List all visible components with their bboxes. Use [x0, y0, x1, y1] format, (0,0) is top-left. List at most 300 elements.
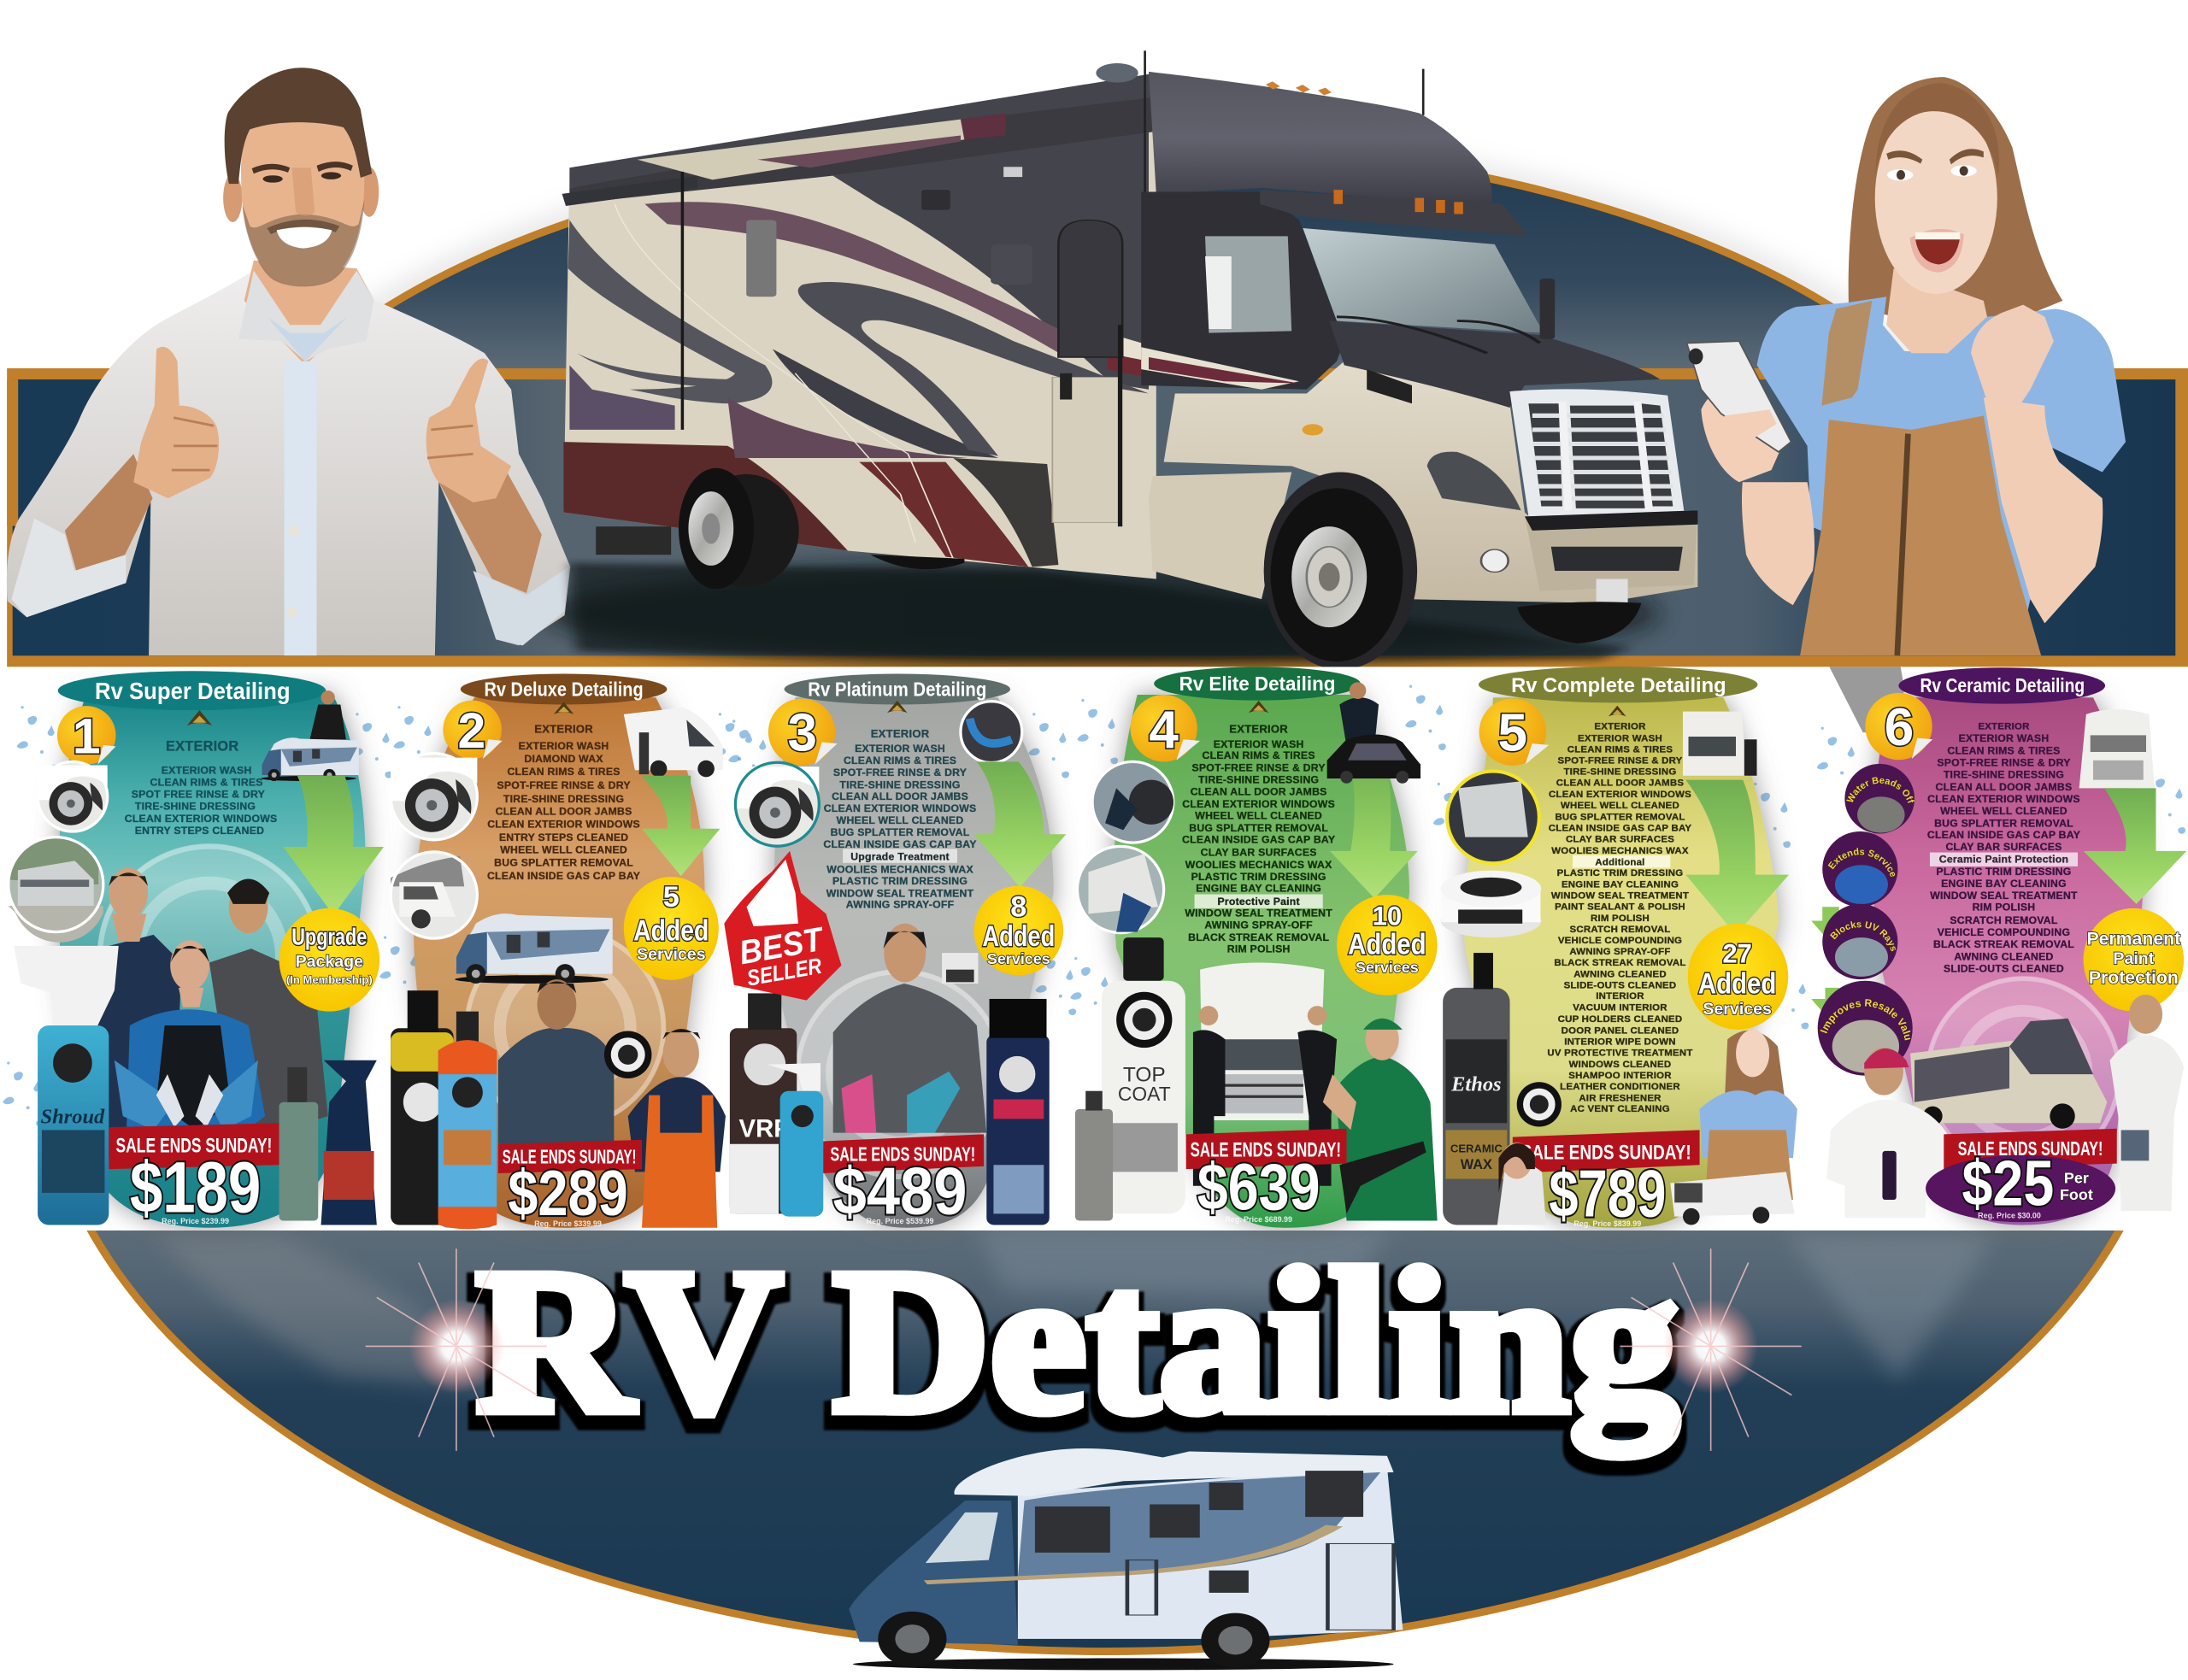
yellow bubble: 5	[663, 881, 679, 913]
service list	[1182, 723, 1335, 955]
service list: CLEAN RIMS & TIRES	[507, 766, 621, 778]
entry door	[991, 220, 1122, 526]
motorhome front	[1200, 963, 1324, 1120]
rv illustration	[455, 913, 613, 984]
small green arrows	[1811, 837, 1864, 1021]
service list: WHEEL WELL CLEANED	[837, 814, 963, 826]
orange overall worker	[628, 1029, 726, 1228]
yellow bubble	[1688, 924, 1788, 1030]
service list: WINDOW SEAL TREATMENT	[1185, 908, 1332, 919]
badge 3	[768, 698, 838, 766]
chrome grille	[1509, 389, 1685, 516]
service list: WOOLIES MECHANICS WAX	[1185, 859, 1332, 871]
watermark seal	[97, 844, 321, 1067]
purple price area	[1926, 1155, 2115, 1222]
badge 3: 3	[788, 703, 817, 762]
arrow	[642, 776, 720, 876]
headlight	[1427, 452, 1521, 510]
card 6: Rv Ceramic Detailing	[1811, 667, 2186, 1231]
sale banner: SALE ENDS SUNDAY!	[503, 1146, 636, 1168]
badge 2: 2	[457, 703, 485, 759]
best seller badge: SELLER	[745, 953, 824, 991]
sale banner	[1186, 1129, 1347, 1169]
benefit circles: Water Beads Off	[1846, 777, 1915, 803]
yellow bubble: 10	[1373, 901, 1402, 931]
price: $25	[1962, 1148, 2054, 1219]
ground shadow	[569, 563, 1630, 660]
service list: DOOR PANEL CLEANED	[1562, 1025, 1679, 1036]
blue spray bottle: Shroud	[40, 1105, 105, 1128]
service list: CLEAN EXTERIOR WINDOWS	[125, 813, 277, 825]
service list	[487, 723, 640, 882]
team of three	[97, 867, 328, 1158]
service list: CLEAN RIMS & TIRES	[1203, 749, 1315, 761]
service list: CLEAN RIMS & TIRES	[844, 755, 956, 767]
service list: SPOT-FREE RINSE & DRY	[497, 779, 631, 791]
regular price: Reg. Price $839.99	[1573, 1219, 1641, 1228]
card 2: Rv Deluxe Detailing	[379, 674, 756, 1229]
service list: CUP HOLDERS CLEANED	[1558, 1014, 1682, 1025]
service list: BLACK STREAK REMOVAL	[1933, 938, 2074, 950]
service list: AWNING SPRAY-OFF	[1569, 947, 1671, 957]
service list: WINDOW SEAL TREATMENT	[1930, 890, 2078, 902]
water drops	[3, 706, 392, 1127]
header: Rv Super Detailing	[95, 678, 291, 704]
yellow bubble: Added	[633, 914, 709, 947]
service list: PLASTIC TRIM DRESSING	[1557, 868, 1683, 878]
yellow bubble: Added	[1348, 929, 1426, 961]
service list: EXTERIOR	[166, 738, 238, 754]
regular price: Reg. Price $539.99	[867, 1217, 933, 1225]
card 3: Rv Platinum Detailing	[724, 674, 1076, 1228]
bottle: CERAMIC	[1450, 1143, 1503, 1155]
small motorhome	[849, 1448, 1403, 1670]
service list: SPOT FREE RINSE & DRY	[132, 788, 265, 800]
arrow	[1330, 754, 1418, 898]
service list: EXTERIOR	[1229, 723, 1288, 736]
service list: Ceramic Paint Protection	[1939, 853, 2068, 865]
service list: TIRE-SHINE DRESSING	[1944, 769, 2064, 781]
service list: CLAY BAR SURFACES	[1945, 841, 2062, 853]
service list: WHEEL WELL CLEANED	[1940, 805, 2067, 817]
header	[461, 674, 667, 704]
top truck	[1683, 712, 1757, 776]
card 1: Rv Super Detailing	[3, 671, 392, 1228]
service list: CLEAN ALL DOOR JAMBS	[1936, 781, 2072, 793]
title: RV Detailing: RV Detailing	[476, 1228, 1679, 1456]
service list	[823, 727, 977, 911]
badge 5	[1479, 698, 1549, 766]
service list: TIRE-SHINE DRESSING	[839, 778, 961, 790]
yellow bubble	[2084, 908, 2184, 1012]
service list: CLEAN EXTERIOR WINDOWS	[824, 802, 976, 814]
service list: EXTERIOR WASH	[1578, 734, 1662, 744]
regular price: Reg. Price $30.00	[1978, 1211, 2041, 1219]
service list: EXTERIOR	[1594, 722, 1646, 732]
two staff	[1193, 1006, 1337, 1186]
regular price: Reg. Price $339.99	[534, 1219, 602, 1228]
small truck	[942, 953, 978, 984]
bottles	[730, 993, 1050, 1225]
small bottles	[279, 1060, 377, 1225]
cab	[849, 1501, 1018, 1645]
yellow bubble: Services	[987, 950, 1050, 967]
logo badge	[604, 1031, 651, 1078]
service list: VACUUM INTERIOR	[1573, 1002, 1667, 1013]
service list: UV PROTECTIVE TREATMENT	[1547, 1049, 1693, 1059]
service list: BUG SPLATTER REMOVAL	[831, 826, 970, 838]
service list: TIRE-SHINE DRESSING	[135, 801, 256, 813]
service list: EXTERIOR WASH	[1959, 732, 2049, 744]
service list: VEHICLE COMPOUNDING	[1558, 936, 1682, 946]
small lady	[1497, 1143, 1546, 1225]
yellow bubble	[279, 908, 379, 1012]
rear wheel	[596, 468, 964, 589]
tool photo	[1829, 667, 1905, 732]
service list: CLEAN INSIDE GAS CAP BAY	[487, 870, 640, 882]
service list: CLEAN EXTERIOR WINDOWS	[1927, 793, 2080, 805]
bottles	[391, 990, 497, 1229]
service list: SCRATCH REMOVAL	[1570, 925, 1670, 935]
service list: CLEAN EXTERIOR WINDOWS	[487, 819, 640, 831]
white bottle: TOP	[1123, 1063, 1166, 1086]
service list: CLEAN RIMS & TIRES	[1567, 745, 1673, 755]
rv illustration	[1670, 1172, 1795, 1225]
benefit circles	[1817, 764, 1915, 1076]
regular price: Reg. Price $689.99	[1225, 1215, 1292, 1224]
arrow	[2084, 788, 2186, 904]
header	[785, 674, 1010, 704]
yellow bubble: Upgrade	[291, 923, 367, 949]
service list: BUG SPLATTER REMOVAL	[494, 856, 633, 868]
service list: SHAMPOO INTERIOR	[1568, 1071, 1672, 1081]
photo and wax tin	[1441, 772, 1541, 937]
service list: PAINT SEALANT & POLISH	[1555, 902, 1685, 912]
service list: LEATHER CONDITIONER	[1560, 1082, 1680, 1092]
blue spray bottle	[14, 946, 119, 1225]
per foot: Per	[2064, 1169, 2089, 1186]
price: $489	[833, 1153, 967, 1228]
banner panel	[7, 368, 2188, 667]
rv illustration	[1910, 1019, 2107, 1129]
yellow bubble: Services	[1703, 1000, 1772, 1019]
service list: CLEAN INSIDE GAS CAP BAY	[1549, 824, 1691, 834]
technician	[833, 924, 986, 1133]
service list: TIRE-SHINE DRESSING	[503, 793, 624, 805]
cheering woman	[1700, 1030, 1797, 1200]
arrow	[974, 761, 1066, 887]
water drops	[379, 706, 756, 1002]
service list: ENTRY STEPS CLEANED	[499, 831, 628, 843]
card body	[58, 693, 366, 1228]
photos	[1077, 761, 1173, 933]
service list: CLEAN RIMS & TIRES	[150, 777, 263, 789]
service list: INTERIOR	[1596, 991, 1644, 1002]
service list: EXTERIOR WASH	[162, 765, 252, 777]
service list: BUG SPLATTER REMOVAL	[1555, 812, 1685, 822]
card body	[1464, 697, 1779, 1228]
yellow bubble: 8	[1010, 891, 1026, 924]
windshield	[926, 1513, 998, 1563]
service list: VEHICLE COMPOUNDING	[1938, 926, 2070, 938]
price: $189	[130, 1147, 261, 1228]
card body	[774, 697, 1054, 1228]
sale banner: SALE ENDS SUNDAY!	[116, 1135, 272, 1158]
watermark seal	[1926, 977, 2121, 1172]
service list: EXTERIOR	[534, 723, 593, 736]
service list	[1547, 722, 1693, 1114]
sale banner: SALE ENDS SUNDAY!	[1958, 1137, 2103, 1160]
service list: SLIDE-OUTS CLEANED	[1944, 962, 2064, 974]
logo	[1249, 701, 1268, 713]
water drops	[1070, 685, 1446, 1022]
service list: INTERIOR WIPE DOWN	[1564, 1037, 1676, 1047]
yellow bubble: Added	[982, 920, 1055, 953]
service list: PLASTIC TRIM DRESSING	[1936, 866, 2072, 878]
header: Rv Platinum Detailing	[808, 678, 986, 701]
windows	[1035, 1471, 1363, 1593]
service list: CLAY BAR SURFACES	[1566, 835, 1674, 845]
wheels	[878, 1612, 1270, 1668]
header	[1154, 667, 1361, 701]
service list: SPOT-FREE RINSE & DRY	[1937, 757, 2071, 769]
sparkle right	[1620, 1248, 1802, 1451]
service list: TIRE-SHINE DRESSING	[1198, 774, 1319, 786]
photos	[391, 754, 477, 938]
service list: CLEAN RIMS & TIRES	[1947, 744, 2061, 756]
logo tin	[1517, 1082, 1562, 1127]
service list	[125, 738, 277, 837]
sale banner	[1513, 1130, 1700, 1173]
service list: AWNING CLEANED	[1954, 950, 2054, 962]
badge 4	[1130, 695, 1200, 761]
header	[1898, 667, 2105, 704]
service list: WOOLIES MECHANICS WAX	[826, 864, 973, 876]
service list: EXTERIOR WASH	[519, 740, 609, 752]
badge 4: 4	[1149, 701, 1179, 760]
sale banner: SALE ENDS SUNDAY!	[830, 1143, 975, 1165]
bottle: WAX	[1461, 1157, 1492, 1172]
yellow bubble: 27	[1722, 939, 1752, 969]
entry step	[1149, 472, 1291, 599]
service list: BUG SPLATTER REMOVAL	[1934, 817, 2073, 829]
header: Rv Ceramic Detailing	[1920, 674, 2085, 696]
service list: SCRATCH REMOVAL	[1950, 914, 2058, 926]
service list: CLAY BAR SURFACES	[1201, 847, 1317, 859]
watermark seal	[465, 928, 666, 1129]
door	[1327, 1543, 1394, 1630]
service list	[1927, 721, 2080, 974]
yellow bubble: Services	[637, 945, 706, 964]
technician	[498, 979, 614, 1144]
service list: AC VENT CLEANING	[1570, 1104, 1670, 1114]
service list: WHEEL WELL CLEANED	[1195, 810, 1322, 822]
bottle: Ethos	[1450, 1073, 1502, 1096]
yellow bubble	[974, 886, 1063, 975]
service list: Upgrade Treatment	[850, 850, 950, 862]
cab and hood	[1141, 83, 1697, 603]
white bottle	[1075, 937, 1185, 1221]
water drops	[1433, 783, 1809, 1029]
card body	[414, 697, 704, 1228]
service list: RIM POLISH	[1973, 902, 2035, 913]
logo	[187, 710, 212, 725]
service list: BUG SPLATTER REMOVAL	[1189, 822, 1328, 834]
service list: EXTERIOR WASH	[1214, 738, 1304, 750]
service list: ENGINE BAY CLEANING	[1562, 879, 1679, 890]
yellow bubble: (In Membership)	[286, 973, 373, 986]
service list: AWNING SPRAY-OFF	[846, 899, 955, 911]
yellow bubble: Protection	[2089, 968, 2179, 988]
service list: EXTERIOR	[1978, 721, 2030, 731]
card body	[1114, 695, 1409, 1228]
blue upper side	[1018, 1472, 1380, 1577]
large motorhome	[562, 50, 1697, 670]
bottom bowl panel	[85, 1228, 2126, 1655]
front wheel	[1264, 472, 1641, 670]
benefit circles: Improves Resale Value	[1820, 998, 1911, 1041]
service list: WHEEL WELL CLEANED	[500, 844, 627, 856]
photos	[9, 761, 108, 943]
header: Rv Elite Detailing	[1179, 673, 1335, 695]
badge 1	[57, 706, 116, 765]
service list: WINDOW SEAL TREATMENT	[826, 887, 974, 899]
service list: ENGINE BAY CLEANING	[1941, 878, 2067, 890]
arrow	[1685, 780, 1789, 935]
card body	[1873, 697, 2143, 1225]
service list: BLACK STREAK REMOVAL	[1554, 958, 1686, 968]
service list: SLIDE-OUTS CLEANED	[1564, 980, 1676, 990]
cards strip background	[0, 667, 2188, 1231]
service list: WINDOWS CLEANED	[1569, 1060, 1671, 1070]
service list: SPOT-FREE RINSE & DRY	[1192, 761, 1326, 773]
service list: Protective Paint	[1217, 896, 1300, 908]
header: Rv Complete Detailing	[1511, 674, 1726, 697]
service list: CLEAN ALL DOOR JAMBS	[496, 805, 632, 817]
card 5: Rv Complete Detailing	[1433, 667, 1809, 1231]
bottles: VRP	[738, 1115, 791, 1143]
logo	[554, 702, 573, 714]
badge 5: 5	[1498, 703, 1527, 762]
service list: CLEAN EXTERIOR WINDOWS	[1549, 790, 1691, 800]
per foot: Foot	[2060, 1186, 2093, 1203]
service list: SPOT-FREE RINSE & DRY	[833, 767, 967, 778]
top white van	[624, 708, 723, 777]
service list: CLEAN ALL DOOR JAMBS	[1556, 778, 1684, 789]
service list: EXTERIOR WASH	[855, 743, 945, 755]
service list: PLASTIC TRIM DRESSING	[1191, 871, 1326, 883]
sale banner	[498, 1140, 642, 1173]
sale banner: SALE ENDS SUNDAY!	[1191, 1138, 1341, 1161]
service list: ENTRY STEPS CLEANED	[135, 825, 264, 837]
service list: AWNING SPRAY-OFF	[1204, 919, 1313, 931]
photos	[735, 702, 1022, 846]
price: $289	[508, 1157, 628, 1229]
benefit circles: Blocks UV Rays	[1829, 921, 1896, 952]
service list: BLACK STREAK REMOVAL	[1188, 931, 1329, 943]
card 4: Rv Elite Detailing	[1070, 667, 1446, 1228]
body	[1018, 1466, 1403, 1639]
price: $639	[1197, 1151, 1320, 1224]
cab-over roof	[954, 1448, 1394, 1496]
service list: CLEAN EXTERIOR WINDOWS	[1182, 798, 1335, 810]
service list: EXTERIOR	[871, 727, 930, 740]
service list: RIM POLISH	[1227, 943, 1291, 955]
badge 6	[1865, 693, 1932, 760]
badge 2	[443, 701, 503, 759]
bottle	[1443, 953, 1510, 1225]
badge 1: 1	[73, 709, 101, 765]
header	[58, 671, 326, 710]
logo	[1609, 706, 1626, 716]
top truck	[2079, 709, 2155, 788]
service list: SPOT-FREE RINSE & DRY	[1557, 756, 1683, 767]
yellow bubble	[624, 877, 719, 980]
best seller badge	[724, 851, 841, 1001]
regular price: Reg. Price $239.99	[162, 1217, 229, 1225]
white bottle: COAT	[1118, 1083, 1171, 1105]
technician with bottle	[1826, 1048, 1959, 1218]
green uniform worker	[1323, 1019, 1438, 1221]
service list: WHEEL WELL CLEANED	[1561, 801, 1679, 811]
header: Rv Deluxe Detailing	[485, 678, 644, 701]
water drops	[1817, 727, 2185, 1141]
water drops	[728, 713, 1076, 1015]
best seller badge: BEST	[737, 920, 828, 972]
man giving thumbs up	[7, 68, 570, 655]
top van and worker	[261, 690, 359, 781]
service list: DIAMOND WAX	[524, 753, 603, 765]
service list: AWNING CLEANED	[1573, 969, 1667, 979]
top arch panel	[188, 126, 2031, 977]
yellow bubble: Package	[296, 952, 363, 971]
badge 6: 6	[1885, 698, 1914, 757]
header	[1479, 667, 1757, 702]
technician in white	[2110, 995, 2184, 1211]
service list: CLEAN INSIDE GAS CAP BAY	[1927, 829, 2080, 841]
service list: RIM POLISH	[1591, 913, 1650, 924]
woman with phone cheering	[1687, 77, 2126, 655]
yellow bubble: Added	[1698, 967, 1776, 1000]
service list: CLEAN INSIDE GAS CAP BAY	[823, 838, 977, 850]
sale banner: SALE ENDS SUNDAY!	[1521, 1142, 1691, 1165]
service list: WINDOW SEAL TREATMENT	[1551, 890, 1689, 901]
benefit circles: Extends Service	[1827, 848, 1896, 877]
price: $789	[1549, 1156, 1666, 1231]
cab roof fairing	[1149, 72, 1492, 206]
sale banner	[823, 1134, 984, 1173]
service list: CLEAN ALL DOOR JAMBS	[832, 790, 968, 802]
service list: ENGINE BAY CLEANING	[1196, 883, 1321, 895]
tan stripe	[926, 1526, 1334, 1583]
per foot	[2060, 1169, 2093, 1203]
coach body	[563, 83, 1156, 579]
sale banner	[109, 1123, 279, 1169]
top worker and van	[1327, 682, 1420, 784]
yellow bubble: Services	[1356, 959, 1419, 976]
yellow bubble: Permanent	[2086, 929, 2180, 949]
sparkle left	[366, 1248, 547, 1451]
arrow	[283, 776, 384, 915]
service list: AIR FRESHENER	[1579, 1094, 1662, 1104]
yellow bubble: Paint	[2113, 949, 2155, 968]
service list: Additional	[1595, 857, 1645, 867]
watermark seal	[796, 970, 1005, 1179]
service list: WOOLIES MECHANICS WAX	[1551, 846, 1689, 856]
yellow bubble	[1337, 895, 1438, 996]
front bumper	[1481, 510, 1697, 603]
sale banner	[1944, 1129, 2117, 1169]
